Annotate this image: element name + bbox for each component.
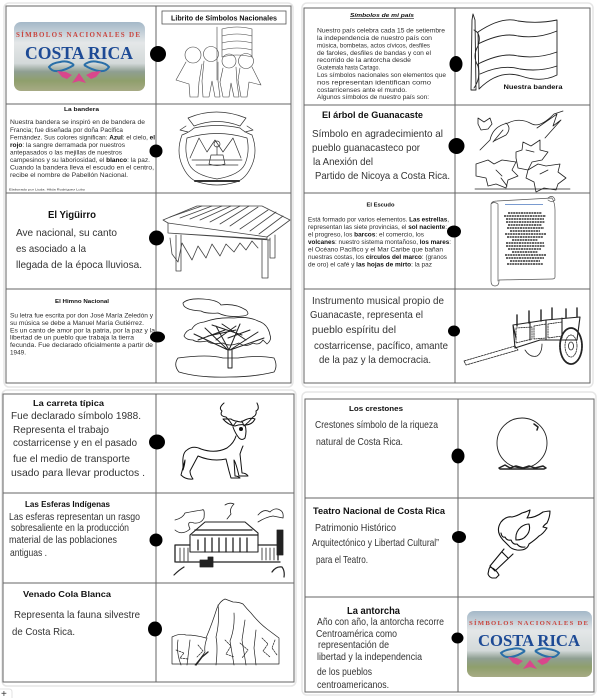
text: La bandera: Elaborado por Licda. Hilda Rodríguez Lobo [9, 188, 85, 192]
text: Las Esferas Indígenas: material de las poblaciones [9, 534, 117, 546]
banner: Símbolos Nacionales de Costa Rica: COSTA RICA [25, 43, 133, 63]
text: Símbolos de mi país: costarricenses ante el mundo. [317, 87, 407, 94]
text: Instrumento musical: Guanacaste, representa el [310, 309, 423, 321]
text: La carreta típica: usado para llevar productos . [11, 467, 145, 479]
text: El Himno Nacional: fecunda. Fue declarado oficialmente a partir de [10, 342, 154, 349]
text: La bandera: Fernández. Sus colores significan: Azul: el cielo, el [10, 134, 155, 142]
text: El Yigüirro: es asociado a la [16, 243, 86, 255]
text: Los crestones: natural de Costa Rica. [316, 436, 403, 448]
text: El Himno Nacional: Es un canto de amor por la patria, por la paz y la [10, 328, 156, 334]
banner: Símbolos Nacionales de Costa Rica (repeat) [467, 611, 592, 677]
connector dots [148, 46, 466, 644]
text: El Escudo: El Escudo [366, 202, 395, 208]
text: Los crestones [315, 404, 438, 448]
add tab icon [0, 689, 12, 698]
text: La carreta típica: Representa el trabajo [13, 424, 109, 436]
text: La antorcha: centroamericanos. [317, 679, 389, 691]
text: Venado Cola Blanca: Venado Cola Blanca [23, 589, 111, 599]
text: La antorcha: libertad y la independencia [317, 651, 422, 663]
text: La bandera: recibe el nombre de Pabellón Nacional. [10, 172, 128, 179]
text: El Himno Nacional [10, 299, 156, 356]
text: Símbolos de mi país: recorrido de la antorcha desde [317, 57, 412, 64]
banner: Símbolos Nacionales de Costa Rica [14, 22, 145, 91]
icon: anthem scroll [491, 196, 555, 286]
text: La antorcha: Año con año, la antorcha recorre [317, 616, 444, 628]
banner: Símbolos Nacionales de Costa Rica: SÍMBOLOS NACIONALES DE [16, 31, 140, 39]
text: La bandera: Nuestra bandera se inspiró en de bandera de [10, 119, 146, 126]
text: El Yigüirro: El Yigüirro [48, 210, 96, 221]
text: El árbol de Guanacaste: la Anexión del [313, 156, 373, 168]
text: La carreta típica: fue el medio de transporte [13, 453, 130, 465]
text: Símbolos de mi país: música, bombetas, actos cívicos, desfiles [317, 42, 430, 50]
text: Símbolos de mi país [317, 13, 447, 101]
icon: marimba [163, 206, 290, 278]
text: Venado Cola Blanca: de Costa Rica. [12, 626, 75, 638]
text: La antorcha: Centroamérica como [316, 628, 397, 640]
text: El Escudo: nuestras costas, los círculos del marco: (granos [308, 254, 447, 261]
text: La carreta típica [11, 398, 145, 479]
text: La bandera: rojo: la sangre derramada por nuestros [10, 142, 125, 149]
text: La carreta típica: costarricense y en el pasado [13, 437, 137, 449]
text: Símbolos de mi país: Símbolos de mi país [350, 13, 415, 19]
text: La bandera: campesinos y su laboriosidad, el blanco: la paz. [10, 157, 150, 164]
text: Los crestones: Los crestones [349, 404, 403, 413]
text: El Himno Nacional: Su letra fue escrita por don José María Zeledón y [10, 312, 154, 320]
text: Símbolos de mi país: la independencia de nuestro país con [317, 35, 433, 42]
text: Símbolos de mi país: nos representan identifican como [317, 80, 432, 86]
icon: national theatre [174, 503, 284, 577]
icon: oxcart [464, 308, 582, 365]
text: Teatro Nacional de Costa Rica [312, 506, 445, 566]
icon: stone sphere [497, 418, 547, 469]
text: La bandera [9, 107, 155, 192]
panel: top left card [4, 3, 293, 387]
text: Las Esferas Indígenas: Las esferas representan un rasgo [9, 511, 140, 523]
text: El Himno Nacional: su música se debe a Manuel María Gutiérrez. [10, 320, 144, 327]
icon: torch [488, 510, 550, 578]
text: El Yigüirro [16, 210, 142, 271]
text: Venado Cola Blanca: Representa la fauna silvestre [14, 609, 140, 621]
text: El Escudo: representan las siete provincias, el sol naciente: [308, 224, 447, 231]
text: Instrumento musical: de la paz y la democracia. [319, 354, 431, 366]
text: El árbol de Guanacaste [312, 110, 450, 182]
text: Teatro Nacional de Costa Rica: Arquitectónico y Libertad Cultural” [312, 537, 439, 549]
text: La bandera: Francia; fue diseñada por doña Pacífica [10, 127, 123, 134]
panel: bottom left card [2, 390, 296, 686]
panel: bottom right card [302, 392, 596, 695]
text: Teatro Nacional de Costa Rica: Teatro Nacional de Costa Rica [313, 506, 445, 516]
text: El Himno Nacional: libertad de un pueblo que trabaja la tierra [10, 334, 135, 342]
icon: guanacaste tree [176, 299, 276, 377]
text: El Escudo: el Océano Pacífico y el Mar Caribe que bañan [308, 246, 444, 254]
text: El Himno Nacional: El Himno Nacional [55, 299, 110, 305]
text: El Escudo: el progreso, los barcos: el comercio, los [308, 232, 424, 238]
text: La bandera: La bandera [64, 107, 100, 113]
banner: Símbolos Nacionales de Costa Rica (repeat): COSTA RICA [478, 631, 581, 650]
text: Teatro Nacional de Costa Rica: Patrimonio Histórico [315, 522, 396, 534]
icon: children with flag [176, 27, 261, 97]
text: Las Esferas Indígenas: sobresaliente en la producción [11, 522, 129, 534]
text: La antorcha: La antorcha [347, 605, 400, 617]
text: La bandera: antepasados o las mejillas de nuestros [10, 150, 122, 156]
text: El Himno Nacional: 1949. [10, 350, 26, 356]
text: La antorcha: representación de [318, 639, 389, 651]
text: Venado Cola Blanca [12, 589, 140, 638]
text: El Escudo [308, 202, 451, 268]
text: Teatro Nacional de Costa Rica: para el Teatro. [316, 554, 368, 566]
text: El Escudo: de oro) el café y las hojas de mirto: la paz [308, 262, 432, 268]
text: El Escudo: volcanes: nuestro sistema montañoso, los mares: [308, 239, 451, 246]
text: La carreta típica: Fue declarado símbolo 1988. [11, 410, 141, 422]
heading box: Librito de Símbolos Nacionales [162, 11, 286, 24]
text: El árbol de Guanacaste: Símbolo en agradecimiento al [312, 128, 443, 140]
text: El Yigüirro: Ave nacional, su canto [16, 227, 117, 239]
icon: white-tailed deer [181, 403, 258, 479]
text: Los crestones: Crestones símbolo de la riqueza [315, 419, 438, 431]
text: Símbolos de mi país: de faroles, desfiles de bandas y con el [317, 50, 431, 57]
icon: crestones mountain [172, 599, 279, 665]
text: Las Esferas Indígenas: Las Esferas Indígenas [25, 500, 111, 509]
panel: top right card [302, 3, 593, 387]
text: Instrumento musical: costarricense, pacífico, amante [314, 340, 448, 352]
text: El árbol de Guanacaste: Partido de Nicoya a Costa Rica. [315, 170, 450, 182]
text: La antorcha [316, 605, 444, 691]
text: La bandera: Cuando la bandera lleva el escudo en el centro, [10, 164, 154, 172]
text: Símbolos de mi país: Guatemala hasta Cartago. [317, 64, 380, 72]
banner: Símbolos Nacionales de Costa Rica (repeat): SÍMBOLOS NACIONALES DE [469, 619, 589, 627]
text: Instrumento musical: Instrumento musical propio de [312, 295, 444, 307]
text: El Escudo: Está formado por varios elementos. Las estrellas, [308, 216, 449, 224]
text: Símbolos de mi país: Los símbolos nacionales son elementos que [317, 72, 447, 79]
text: El árbol de Guanacaste: pueblo guanacasteco por [312, 142, 420, 154]
text: Símbolos de mi país: Nuestro país celebra cada 15 de setiembre [317, 28, 446, 34]
text: Instrumento musical [310, 295, 448, 366]
icon: bird and flowers [475, 111, 570, 192]
text: La carreta típica: La carreta típica [33, 398, 104, 408]
text: Las Esferas Indígenas: antiguas . [10, 547, 47, 559]
icon: coat of arms [179, 112, 255, 185]
icon: flag: Nuestra bandera [504, 84, 563, 91]
text: Símbolos de mi país: Algunos símbolos de nuestro país son: [317, 94, 429, 101]
text: Instrumento musical: pueblo espíritu del [312, 324, 396, 336]
icon: flag [471, 14, 563, 91]
text: El Yigüirro: llegada de la época lluviosa. [16, 259, 142, 271]
text: Las Esferas Indígenas [9, 500, 140, 559]
heading box: Librito de Símbolos Nacionales: Librito de Símbolos Nacionales [171, 16, 277, 22]
text: La antorcha: de los pueblos [317, 666, 372, 678]
text: El árbol de Guanacaste: El árbol de Guanacaste [322, 110, 423, 120]
